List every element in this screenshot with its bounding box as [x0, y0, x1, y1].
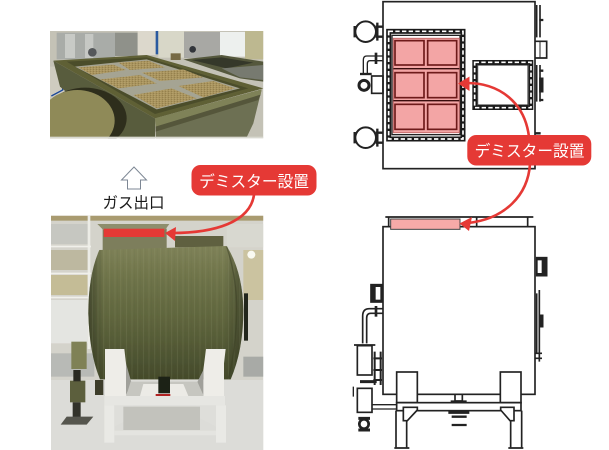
right side fittings	[535, 5, 547, 163]
demister housing frame	[389, 31, 463, 139]
photo: demister media installed in open tank top	[50, 31, 264, 138]
right side fittings	[535, 258, 547, 362]
callout: left demister label	[192, 165, 316, 196]
gas outlet label: ガス出口	[102, 194, 165, 212]
left nozzles and valve	[355, 21, 383, 148]
arrow: right label to top view demister	[458, 76, 529, 137]
diagram: top view of tank	[355, 2, 547, 169]
arrow: left label to demister position	[165, 195, 254, 241]
callout: right demister label	[467, 135, 591, 166]
second manway frame	[475, 62, 531, 108]
callout: left demister label: デミスター設置	[199, 172, 309, 191]
top flange with pink demister section	[385, 217, 533, 229]
demister media pink cells	[393, 38, 459, 133]
diagram: side view of tank	[353, 217, 547, 448]
photo: cylindrical FRP tank on steel frame	[51, 216, 263, 450]
support frame	[394, 372, 523, 448]
arrow: right label to side view demister	[460, 164, 530, 231]
callout: right demister label: デミスター設置	[475, 142, 585, 160]
icon: gas outlet up arrow	[122, 167, 146, 189]
left side piping	[353, 285, 396, 430]
demister marker bar on photo	[104, 229, 164, 237]
